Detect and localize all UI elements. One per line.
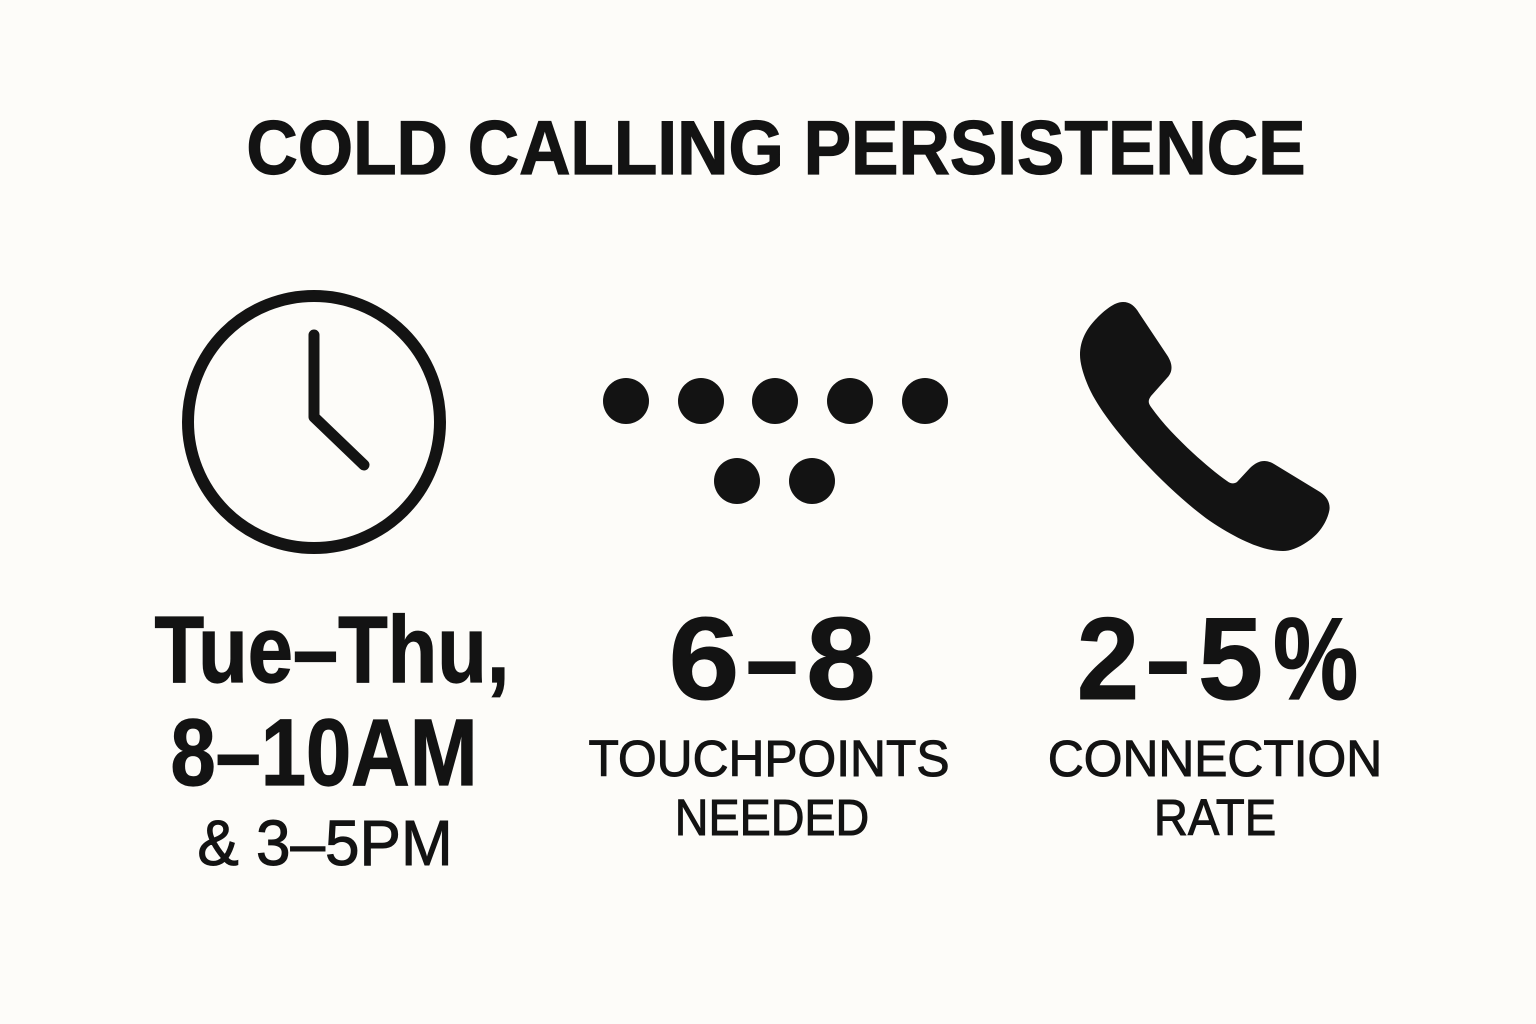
stat: 2–5%: 2 [1076,593,1139,724]
icon: telephone handset [1080,302,1330,551]
stat: 2–5%: 5 [1198,593,1263,724]
stat: 6–8: – [745,593,798,724]
text block: best call times [154,597,509,879]
stat: 6–8: 8 [806,593,876,724]
stat: 6–8: 6 [668,593,739,724]
stat: 6–8 [668,593,876,724]
stat: 2–5%: % [1273,593,1358,724]
text block: connection rate [1048,593,1382,846]
text block: touchpoints: TOUCHPOINTS [589,730,949,787]
text block: best call times: Tue–Thu, [154,597,509,703]
text block: touchpoints [589,593,949,846]
title: COLD CALLING PERSISTENCE [246,106,1306,191]
text block: connection rate: CONNECTION [1048,730,1382,787]
stat: 2–5%: – [1147,593,1188,724]
icon: clock [188,296,440,548]
text block: best call times: 8–10AM [170,700,478,806]
text block: best call times: & 3–5PM [197,807,452,879]
text block: connection rate: RATE [1154,789,1276,846]
text block: touchpoints: NEEDED [675,789,869,846]
icon: seven touchpoint dots [603,378,948,504]
stat: 2–5% [1076,593,1358,724]
